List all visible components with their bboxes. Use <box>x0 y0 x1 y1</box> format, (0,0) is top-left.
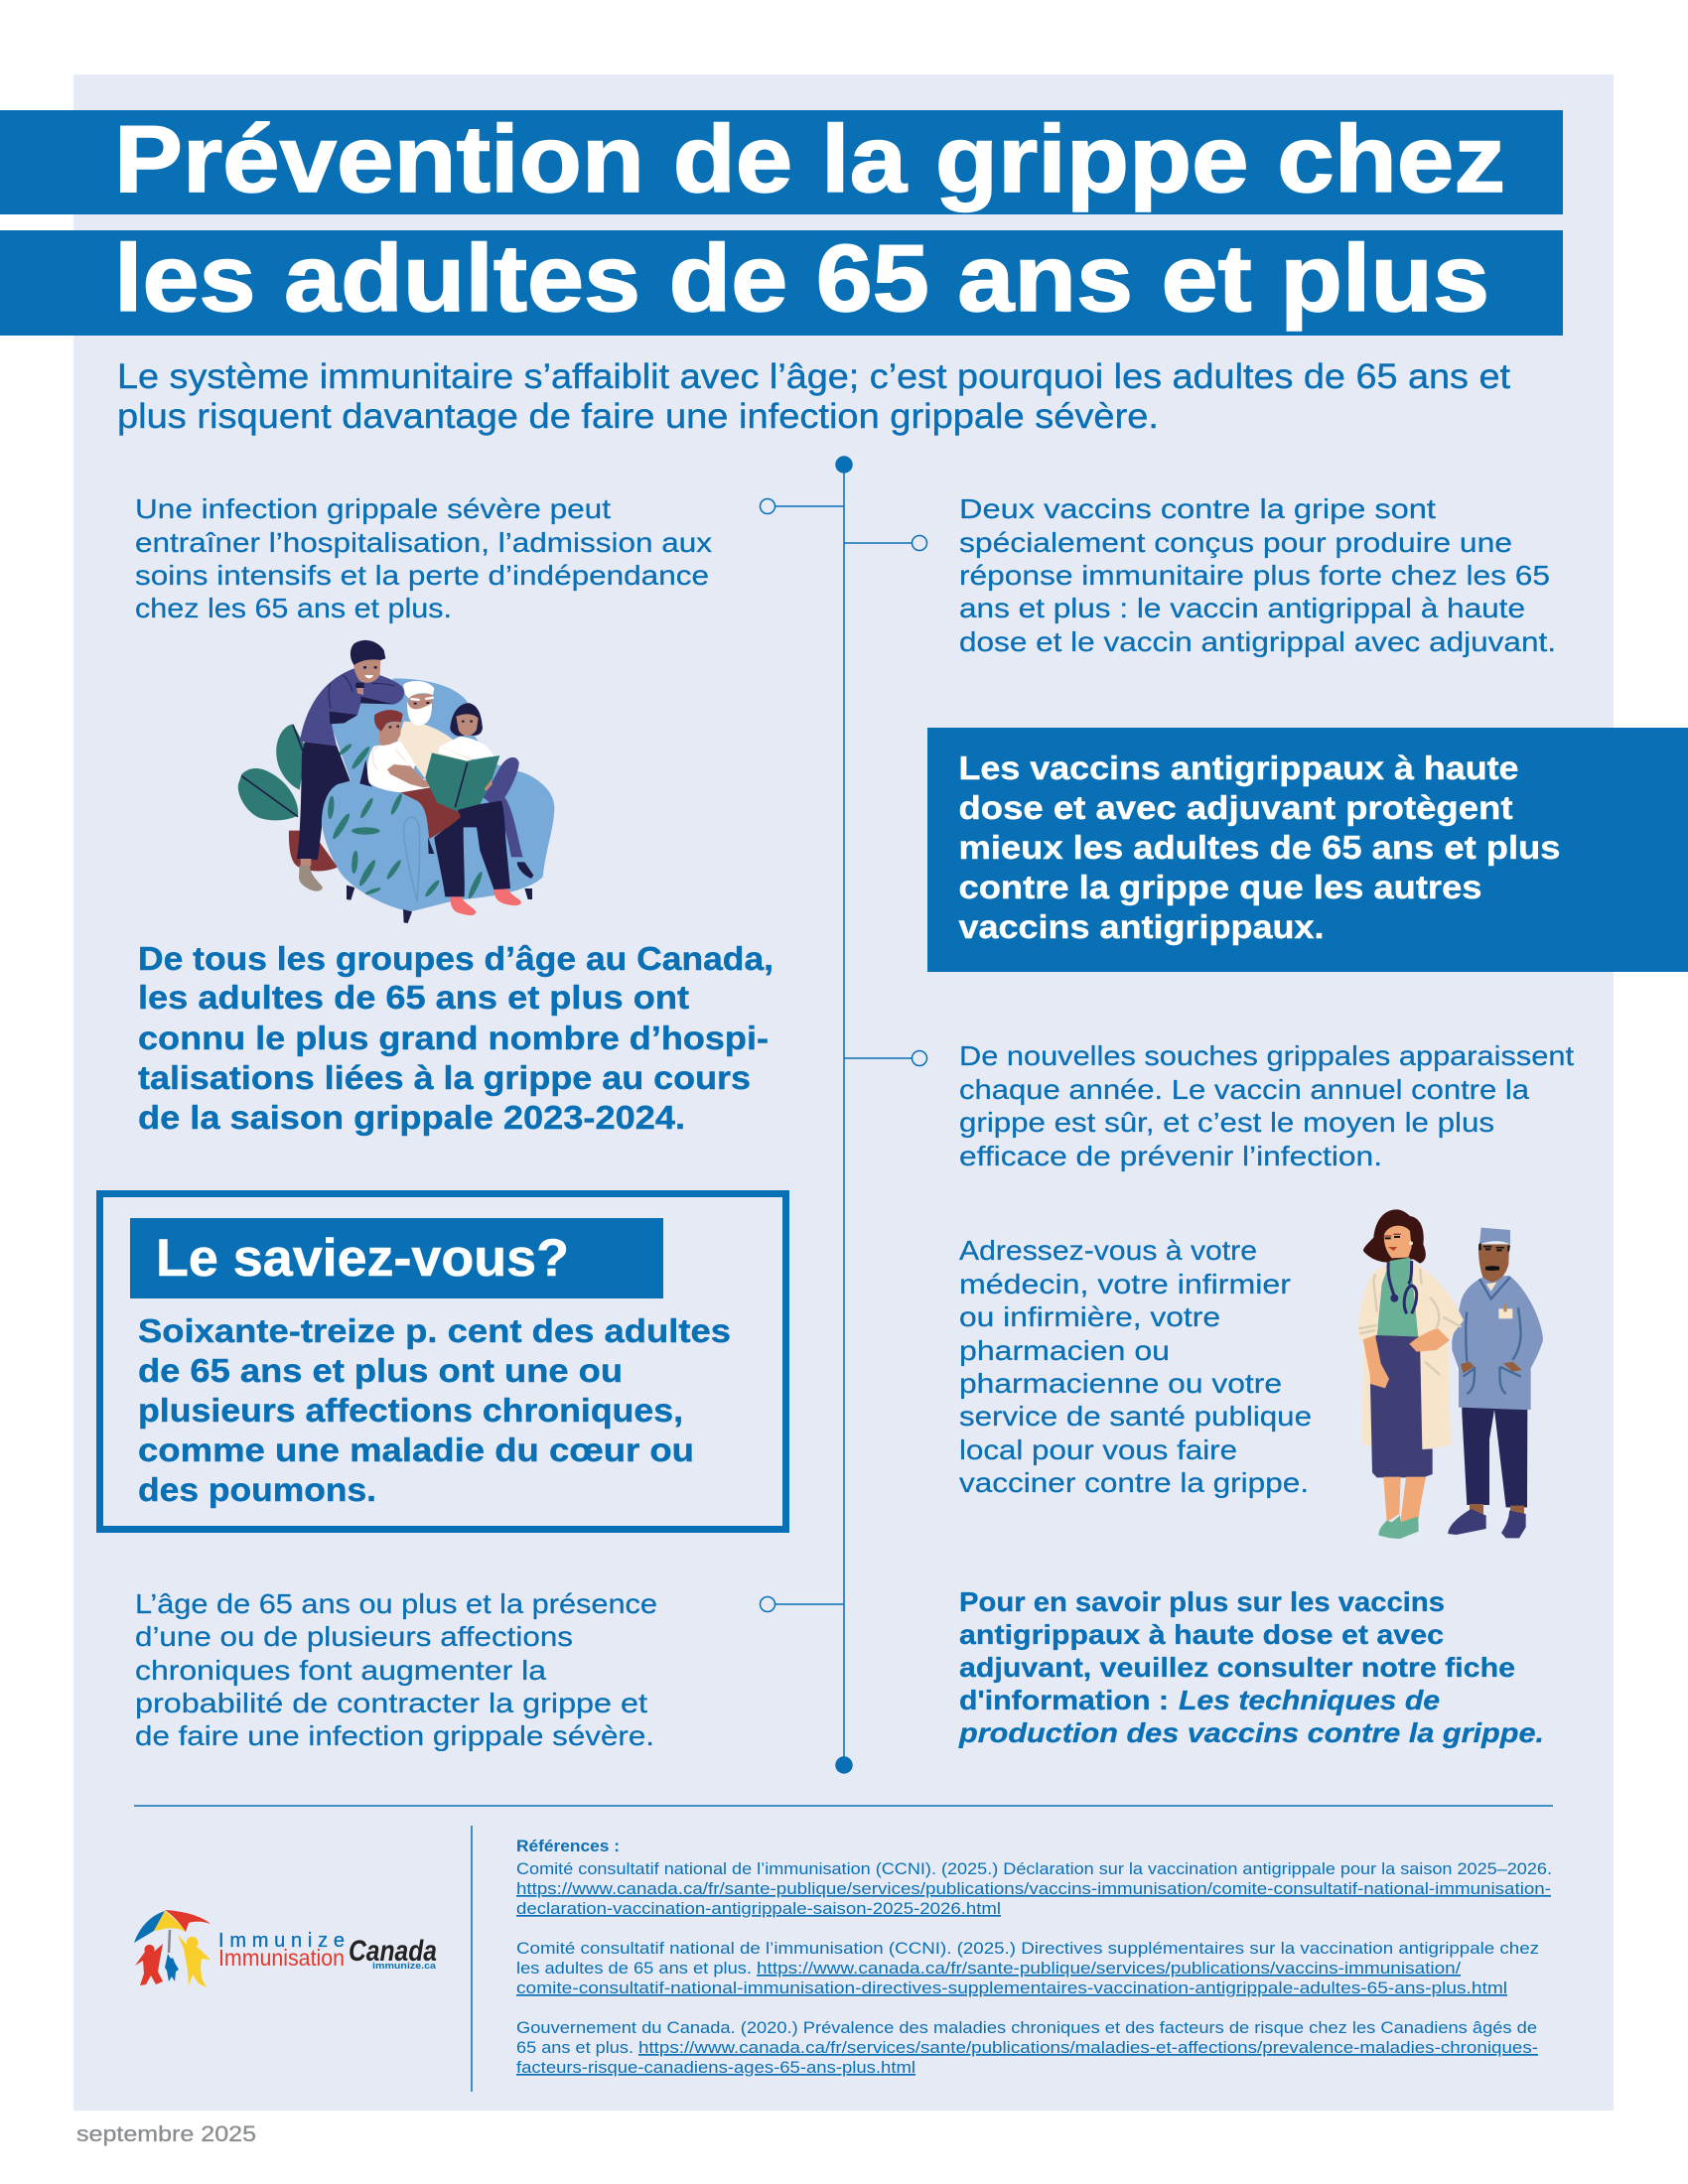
text block: risk factors: chroniques font augmenter la <box>135 1655 546 1686</box>
references: declaration-vaccination-antigrippale-saison-2025-2026.html <box>516 1899 1001 1918</box>
illustration: family on sofa <box>238 640 554 923</box>
text block: severe infection: Une infection grippale sévère peut <box>135 493 611 524</box>
text block: learn more <box>958 1586 1544 1748</box>
text block: risk factors <box>135 1588 657 1751</box>
text block: learn more: production des vaccins contre la grippe. <box>958 1717 1544 1748</box>
timeline <box>761 457 927 1773</box>
references: comite-consultatif-national-immunisation-directives-supplementaires-vaccination-antigrippale-adultes-65-ans-plus.html <box>516 1979 1507 1997</box>
heading: le saviez-vous <box>130 1218 663 1298</box>
text block: two vaccins: Deux vaccins contre la gripe sont <box>959 493 1436 524</box>
text block: where to get vaccinated: Adressez-vous à votre <box>959 1235 1257 1266</box>
references: Comité consultatif national de l’immunisation (CCNI). (2025.) Déclaration sur la vaccination antigrippale pour la saison 2025–2026. <box>516 1859 1552 1878</box>
text block: risk factors: L’âge de 65 ans ou plus et la présence <box>135 1588 657 1619</box>
text block: severe infection: chez les 65 ans et plus. <box>135 593 452 623</box>
references: https://www.canada.ca/fr/services/sante/publications/maladies-et-affections/prevalence-maladies-chroniques- <box>638 2038 1538 2057</box>
divider <box>134 1806 1553 2092</box>
references: Gouvernement du Canada. (2020.) Prévalence des maladies chroniques et des facteurs de risque chez les Canadiens âgés de <box>516 2018 1537 2037</box>
title <box>0 106 1563 336</box>
text block: risk factors: de faire une infection grippale sévère. <box>135 1720 654 1751</box>
text block: where to get vaccinated <box>959 1235 1312 1498</box>
text block: where to get vaccinated: local pour vous faire <box>959 1434 1237 1465</box>
callout: better protection: dose et avec adjuvant protègent <box>959 789 1513 826</box>
title: Prévention de la grippe chez <box>114 106 1505 212</box>
text block: learn more: adjuvant, veuillez consulter notre fiche <box>959 1652 1515 1683</box>
text block: where to get vaccinated: médecin, votre infirmier <box>959 1269 1291 1299</box>
text block: hospitalisations <box>138 940 774 1136</box>
references: Comité consultatif national de l’immunisation (CCNI). (2025.) Directives supplémentaires sur la vaccination antigrippale chez <box>516 1939 1539 1958</box>
text block: new strains: De nouvelles souches grippales apparaissent <box>959 1040 1574 1071</box>
text block: hospitalisations: talisations liées à la grippe au cours <box>138 1059 751 1096</box>
text block: severe infection <box>135 493 712 623</box>
text block: two vaccins: dose et le vaccin antigrippal avec adjuvant. <box>959 626 1556 657</box>
text: chronic conditions statistic <box>138 1312 731 1508</box>
text block: new strains: chaque année. Le vaccin annuel contre la <box>959 1074 1529 1105</box>
text block: two vaccins: ans et plus : le vaccin antigrippal à haute <box>959 593 1525 623</box>
text block: learn more: Les techniques de <box>1179 1685 1440 1715</box>
logo: Immunize Canada <box>134 1910 437 1987</box>
logo: Immunize Canada: Immunisation <box>218 1945 345 1971</box>
text block: hospitalisations: De tous les groupes d’âge au Canada, <box>138 940 774 977</box>
callout: better protection <box>927 728 1688 972</box>
references: https://www.canada.ca/fr/sante-publique/services/publications/vaccins-immunisation/comite-consultatif-national-immunisation- <box>516 1879 1551 1898</box>
text block: severe infection: entraîner l’hospitalisation, l’admission aux <box>135 527 712 558</box>
references: Références : <box>516 1837 620 1855</box>
logo: Immunize Canada: immunize.ca <box>372 1961 437 1971</box>
logo: Immunize Canada: Canada <box>349 1935 437 1968</box>
text block: where to get vaccinated: vacciner contre la grippe. <box>959 1467 1309 1498</box>
text: chronic conditions statistic: comme une maladie du cœur ou <box>138 1432 694 1468</box>
callout: better protection: mieux les adultes de 65 ans et plus <box>959 829 1561 866</box>
logo: Immunize Canada: Immunize <box>218 1930 345 1952</box>
callout: better protection: vaccins antigrippaux. <box>959 908 1325 945</box>
references: https://www.canada.ca/fr/sante-publique/services/publications/vaccins-immunisation/ <box>757 1959 1461 1978</box>
text block: two vaccins: spécialement conçus pour produire une <box>959 527 1512 558</box>
text block: where to get vaccinated: ou infirmière, votre <box>959 1301 1220 1332</box>
intro text: Le système immunitaire s’affaiblit avec l’âge; c’est pourquoi les adultes de 65 ans et <box>117 357 1510 396</box>
references: 65 ans et plus. <box>516 2038 633 2057</box>
text block: risk factors: d’une ou de plusieurs affections <box>135 1621 573 1652</box>
intro text <box>117 357 1510 436</box>
intro text: plus risquent davantage de faire une infection grippale sévère. <box>117 397 1159 436</box>
text block: where to get vaccinated: pharmacienne ou votre <box>959 1368 1282 1399</box>
text block: risk factors: probabilité de contracter la grippe et <box>135 1688 647 1718</box>
callout: better protection: Les vaccins antigrippaux à haute <box>959 750 1519 786</box>
text block: new strains: grippe est sûr, et c’est le moyen le plus <box>959 1107 1494 1138</box>
text block: new strains: efficace de prévenir l’infection. <box>959 1141 1382 1171</box>
text: chronic conditions statistic: de 65 ans et plus ont une ou <box>138 1352 623 1389</box>
text block: two vaccins: réponse immunitaire plus forte chez les 65 <box>959 560 1550 591</box>
text block: hospitalisations: connu le plus grand nombre d’hospi- <box>138 1020 769 1056</box>
illustration: health professionals <box>1357 1209 1543 1539</box>
text block: where to get vaccinated: pharmacien ou <box>959 1335 1170 1366</box>
references <box>516 1837 1552 2077</box>
text: chronic conditions statistic: plusieurs affections chroniques, <box>138 1392 683 1429</box>
text block: severe infection: soins intensifs et la perte d’indépendance <box>135 560 709 591</box>
date: septembre 2025 <box>76 2121 256 2146</box>
text block: learn more: Pour en savoir plus sur les vaccins <box>959 1586 1445 1617</box>
text block: hospitalisations: de la saison grippale 2023-2024. <box>138 1099 685 1136</box>
text block: learn more: antigrippaux à haute dose et avec <box>959 1619 1444 1650</box>
text block: learn more: d'information : <box>959 1685 1169 1715</box>
text block: where to get vaccinated: service de santé publique <box>959 1401 1312 1432</box>
text block: two vaccins <box>959 493 1556 657</box>
references: les adultes de 65 ans et plus. <box>516 1959 752 1978</box>
heading: le saviez-vous: Le saviez-vous? <box>156 1229 569 1288</box>
title: les adultes de 65 ans et plus <box>114 225 1489 332</box>
text: chronic conditions statistic: des poumons. <box>138 1471 376 1508</box>
text block: new strains <box>959 1040 1574 1171</box>
references: facteurs-risque-canadiens-ages-65-ans-plus.html <box>516 2058 915 2077</box>
panel: le saviez-vous <box>99 1193 786 1529</box>
text: chronic conditions statistic: Soixante-treize p. cent des adultes <box>138 1312 731 1349</box>
callout: better protection: contre la grippe que les autres <box>959 869 1481 905</box>
text block: hospitalisations: les adultes de 65 ans et plus ont <box>138 979 689 1016</box>
